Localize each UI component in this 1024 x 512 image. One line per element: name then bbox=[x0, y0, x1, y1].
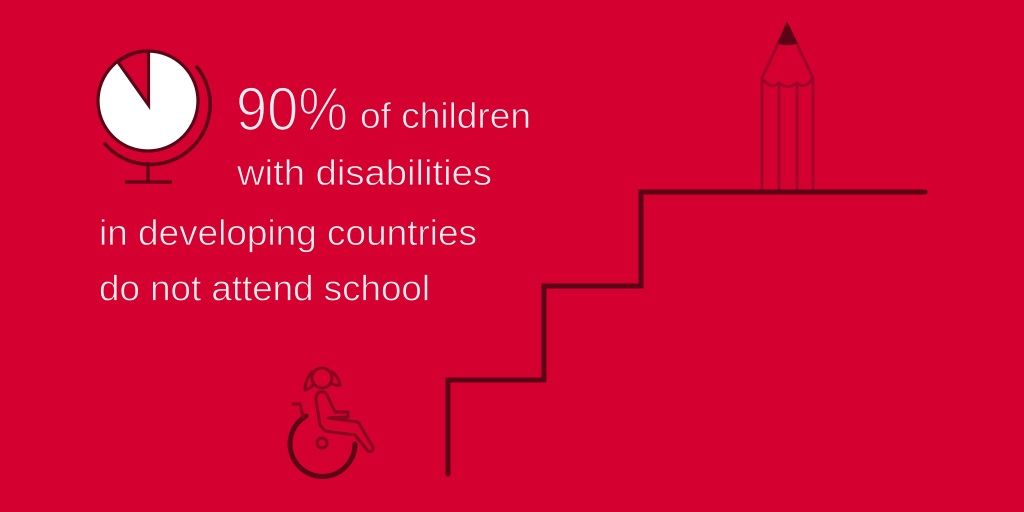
head and pigtails bbox=[305, 368, 340, 390]
body and legs bbox=[316, 392, 373, 452]
wheel hub bbox=[317, 438, 327, 448]
heading: 90%: 90% bbox=[236, 75, 348, 143]
text: do not attend school: do not attend school bbox=[99, 268, 430, 308]
wheelchair handle bbox=[293, 404, 303, 417]
icon: globe pie chart showing 90 percent bbox=[98, 51, 210, 182]
wheel bbox=[290, 416, 355, 477]
staircase line bbox=[448, 192, 925, 474]
text: with disabilities: with disabilities bbox=[236, 152, 492, 193]
icon: pencil on top step bbox=[762, 23, 813, 190]
text: in developing countries: in developing countries bbox=[99, 212, 477, 253]
icon: child in wheelchair bbox=[290, 368, 373, 477]
heading: of children: of children bbox=[360, 95, 531, 136]
